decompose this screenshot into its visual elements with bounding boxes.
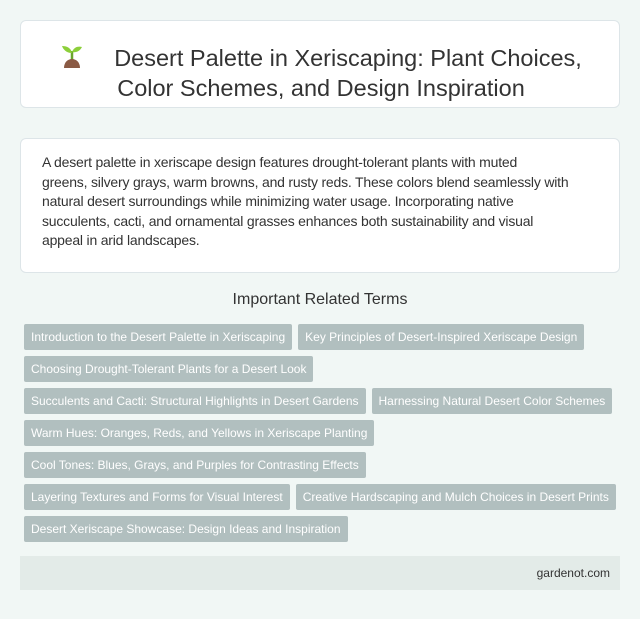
tags: Layering Textures and Forms for Visual Interest (31, 490, 283, 504)
icon: seedling (62, 46, 82, 68)
tags: Introduction to the Desert Palette in Xeriscaping (31, 330, 285, 344)
tags: Harnessing Natural Desert Color Schemes (378, 394, 605, 408)
tags: Choosing Drought-Tolerant Plants for a Desert Look (31, 362, 306, 376)
related terms heading: Important Related Terms (233, 291, 407, 308)
description panel (20, 138, 620, 273)
header panel (20, 20, 620, 108)
description text: appeal in arid landscapes. (42, 232, 199, 248)
description text: natural desert surroundings while minimizing water usage. Incorporating native (42, 193, 514, 209)
tags: Warm Hues: Oranges, Reds, and Yellows in Xeriscape Planting (31, 426, 367, 440)
tags: Succulents and Cacti: Structural Highlights in Desert Gardens (31, 394, 358, 408)
description text (42, 154, 568, 248)
title: Desert Palette in Xeriscaping: Plant Choices, (114, 45, 582, 71)
tags: Desert Xeriscape Showcase: Design Ideas and Inspiration (31, 522, 341, 536)
tags: Creative Hardscaping and Mulch Choices in Desert Prints (303, 490, 609, 504)
description text: A desert palette in xeriscape design features drought-tolerant plants with muted (42, 154, 517, 170)
tags: Cool Tones: Blues, Grays, and Purples for Contrasting Effects (31, 458, 359, 472)
footer: gardenot.com (537, 566, 610, 580)
footer (20, 556, 620, 590)
tags: Key Principles of Desert-Inspired Xeriscape Design (305, 330, 577, 344)
title (62, 45, 582, 101)
description text: greens, silvery grays, warm browns, and rusty reds. These colors blend seamlessly with (42, 174, 568, 190)
title: Color Schemes, and Design Inspiration (117, 75, 525, 101)
description text: succulents, cacti, and ornamental grasses enhances both sustainability and visual (42, 213, 533, 229)
